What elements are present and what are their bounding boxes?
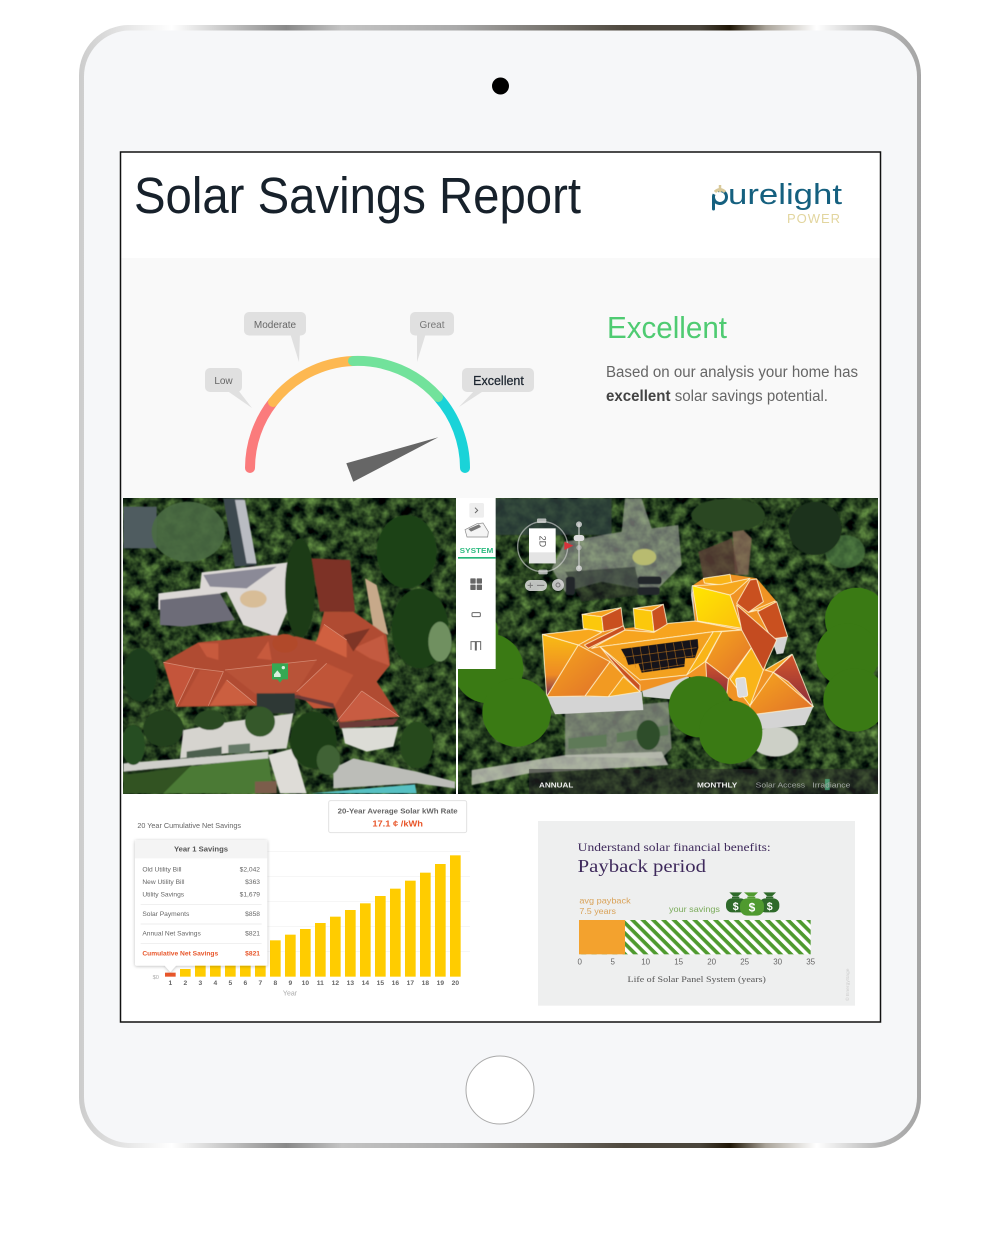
x axis labels: 15 <box>377 980 384 987</box>
x axis labels: 14 <box>362 980 369 987</box>
x axis labels: 16 <box>392 980 399 987</box>
gauge callouts <box>205 312 534 408</box>
axis numbers: 25 <box>740 957 750 966</box>
terrace and lawn <box>180 713 293 758</box>
court, drive and patio <box>123 507 157 548</box>
axis numbers: 30 <box>773 957 783 966</box>
icon: map marker <box>272 663 288 683</box>
gauge callouts: Low <box>214 376 233 387</box>
x axis labels: 1 <box>168 980 172 987</box>
house walls <box>294 694 398 729</box>
axis title: Life of Solar Panel System (years) <box>627 975 766 984</box>
panel: gauge band <box>122 258 880 498</box>
tooltip: year 1 savings: Old Utility Bill <box>142 866 182 873</box>
gauge needle <box>346 437 438 482</box>
payback subtitle: Understand solar financial benefits: <box>578 840 771 854</box>
title: Solar Savings Report <box>134 167 581 224</box>
rating heading: Excellent <box>607 310 727 345</box>
panel: aerial photo of house <box>122 498 456 794</box>
axis numbers: 15 <box>674 957 684 966</box>
axis numbers: 10 <box>641 957 651 966</box>
your savings label: your savings <box>669 904 721 914</box>
x axis labels: 8 <box>273 980 277 987</box>
roof planes <box>542 574 813 715</box>
x axis labels: 13 <box>347 980 354 987</box>
chart title: 20 Year Cumulative Net Savings <box>137 823 242 830</box>
icon: camera <box>492 78 509 94</box>
icon: money bags: $ <box>749 901 756 915</box>
gauge arc <box>250 361 465 468</box>
x axis labels: 3 <box>198 980 202 987</box>
tooltip: year 1 savings: $858 <box>245 911 260 918</box>
logo: purelight power <box>711 179 842 226</box>
tablet frame <box>79 25 921 1148</box>
x axis labels: 5 <box>228 980 232 987</box>
x axis labels: 10 <box>302 980 309 987</box>
tooltip: year 1 savings: Annual Net Savings <box>142 930 201 937</box>
compass controls: 2D <box>537 536 547 548</box>
rate callout: 17.1 ¢ /kWh <box>372 819 423 829</box>
roof <box>163 612 399 722</box>
rate callout <box>329 801 467 833</box>
axis numbers <box>577 957 816 966</box>
tooltip: year 1 savings: $2,042 <box>240 866 260 873</box>
x axis labels: 6 <box>243 980 247 987</box>
axis numbers: 20 <box>707 957 717 966</box>
tooltip: year 1 savings: $363 <box>245 879 260 886</box>
panel: 3D solar roof model <box>453 498 888 794</box>
roof silhouette <box>556 574 807 708</box>
x axis labels: 4 <box>213 980 217 987</box>
icon: money bags <box>726 892 779 916</box>
tooltip: year 1 savings <box>135 840 267 972</box>
bottom tabs bar: Irradiance <box>812 780 850 789</box>
axis numbers: 5 <box>610 957 615 966</box>
bottom tabs bar: ANNUAL <box>539 780 574 789</box>
rating description: excellent solar savings potential. <box>606 388 833 405</box>
x axis labels: 11 <box>317 980 324 987</box>
side toolbar: SYSTEM <box>460 548 494 555</box>
tablet infographic <box>79 25 921 1148</box>
gauge callouts: Excellent <box>473 374 524 388</box>
gauge chart <box>205 312 534 482</box>
bar chart: Year <box>283 991 298 998</box>
gauge callouts: Moderate <box>254 320 297 331</box>
x axis labels: 17 <box>407 980 414 987</box>
x axis labels: 18 <box>422 980 429 987</box>
bar chart: $0 <box>153 975 159 981</box>
icon: money bags: $ <box>767 901 773 913</box>
trees <box>453 588 888 764</box>
screen <box>120 152 880 1022</box>
panel: payback period <box>538 821 855 1006</box>
tooltip: year 1 savings: New Utility Bill <box>142 879 185 886</box>
tooltip: year 1 savings: Solar Payments <box>142 911 190 918</box>
rate callout: 20-Year Average Solar kWh Rate <box>338 806 458 815</box>
bottom tabs bar: MONTHLY <box>697 780 737 789</box>
icon: home button <box>466 1056 534 1124</box>
bar chart <box>153 852 470 998</box>
gauge callouts: Great <box>419 320 445 331</box>
x axis labels: 19 <box>437 980 444 987</box>
building walls <box>542 586 813 729</box>
section: savings chart <box>135 801 470 998</box>
bottom tabs bar <box>529 769 879 794</box>
tooltip: year 1 savings: $821 <box>245 930 260 937</box>
x axis labels: 9 <box>288 980 292 987</box>
solar panel array <box>621 639 698 673</box>
credit: © EnergySage <box>844 968 851 1001</box>
x axis labels: 7 <box>258 980 262 987</box>
tooltip: year 1 savings: Year 1 Savings <box>174 845 228 854</box>
compass controls <box>518 518 584 591</box>
x axis labels <box>168 980 459 987</box>
bottom tabs bar: Solar Access <box>756 780 805 789</box>
icon: money bags: $ <box>733 901 739 913</box>
x axis labels: 12 <box>332 980 339 987</box>
x axis labels: 20 <box>452 980 459 987</box>
avg payback label: avg payback <box>579 896 631 906</box>
tooltip: year 1 savings: Cumulative Net Savings <box>142 950 218 957</box>
axis numbers: 35 <box>806 957 816 966</box>
tooltip: year 1 savings: $1,679 <box>240 892 260 899</box>
payback bar <box>579 920 811 954</box>
logo: purelight power: urelight <box>728 179 842 211</box>
axis numbers: 0 <box>577 957 582 966</box>
tooltip: year 1 savings: $821 <box>245 950 260 957</box>
roof ridge lines <box>163 624 399 722</box>
payback heading: Payback period <box>578 856 706 876</box>
rating description: Based on our analysis your home has <box>606 364 858 381</box>
side toolbar <box>458 498 496 669</box>
tooltip: year 1 savings: Utility Savings <box>142 892 185 899</box>
logo: purelight power: POWER <box>787 211 840 226</box>
panel: payback period: 7.5 years <box>579 906 617 916</box>
x axis labels: 2 <box>183 980 187 987</box>
